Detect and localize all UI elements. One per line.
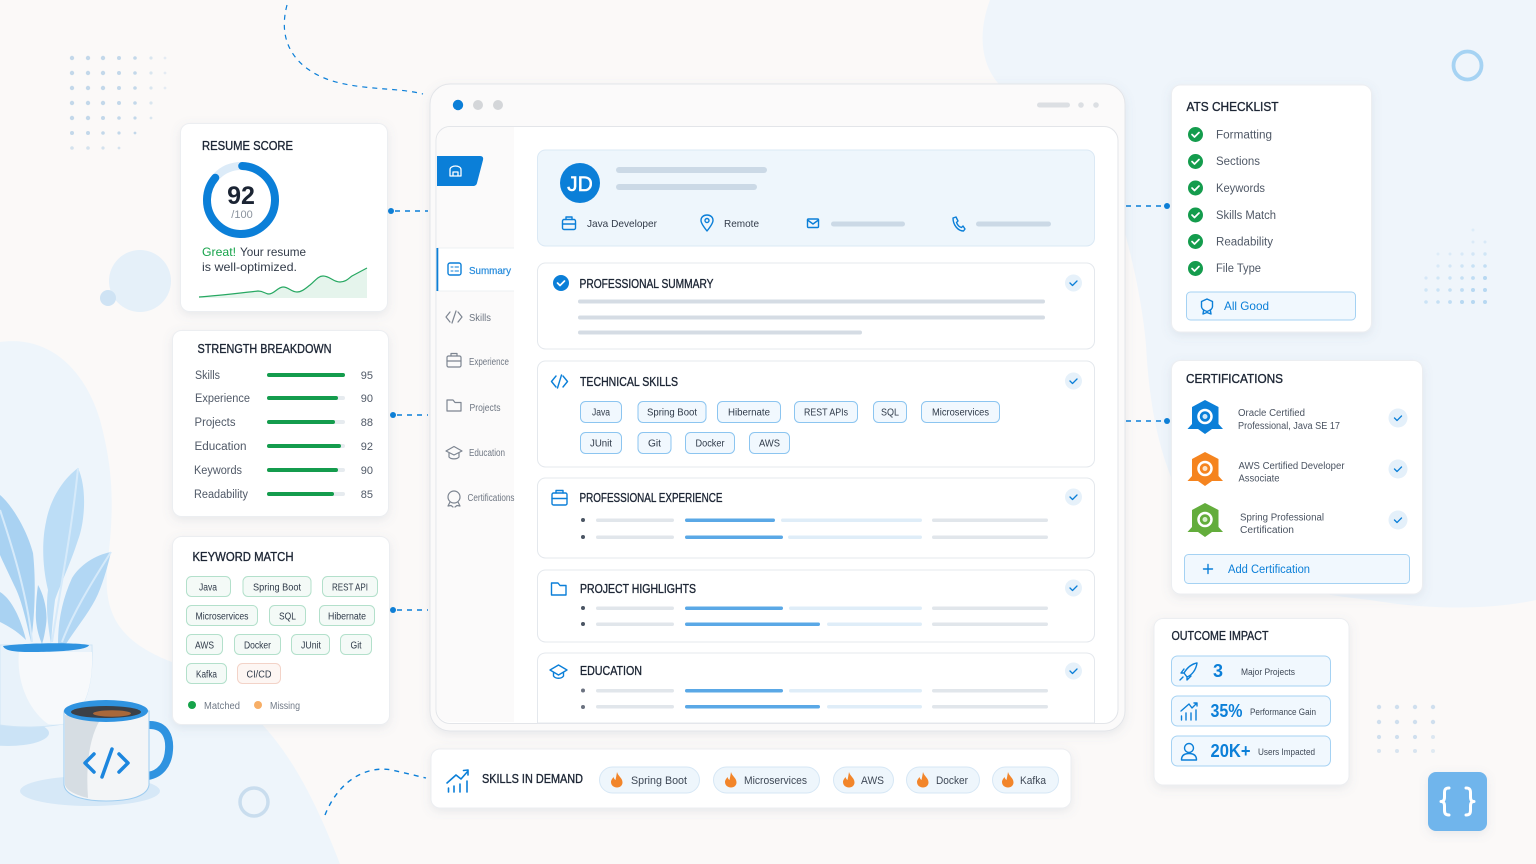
score message [202, 245, 306, 274]
background blob: top right [983, 0, 1536, 608]
demand chips [600, 767, 1058, 793]
panel: ATS checklist [1172, 85, 1372, 332]
heading: certifications: CERTIFICATIONS [1186, 372, 1283, 386]
skill chips: Hibernate [728, 408, 770, 418]
status check [1065, 580, 1082, 596]
icon: code [552, 375, 568, 388]
decorative ring: top right [1454, 52, 1482, 80]
check item: sections [1188, 154, 1260, 169]
metric: major projects: Major Projects [1241, 667, 1295, 677]
heading: strength breakdown: STRENGTH BREAKDOWN [198, 342, 332, 356]
check item: skills match [1188, 208, 1276, 222]
demand chips: AWS [861, 775, 884, 787]
connector: strength breakdown [390, 412, 428, 418]
section: technical skills: TECHNICAL SKILLS [580, 375, 678, 389]
panel: outcome impact [1154, 618, 1349, 785]
nav: summary active [436, 248, 514, 291]
contact row: Java Developer [587, 218, 657, 230]
section: project highlights [538, 570, 1094, 642]
plant pot [0, 645, 92, 727]
metric: performance gain [1172, 696, 1330, 726]
check item: sections: Sections [1216, 156, 1260, 168]
section: professional experience: PROFESSIONAL EXPERIENCE [580, 491, 722, 505]
dashed curve: top [284, 5, 423, 94]
cert: aws: AWS Certified Developer [1238, 461, 1345, 472]
nav: certifications [448, 491, 514, 507]
panel: keyword match [172, 536, 390, 724]
row: skills: Skills [195, 370, 220, 382]
button: add certification [1184, 554, 1410, 584]
keyword chips: CI/CD [246, 670, 272, 680]
status check [1065, 662, 1082, 680]
demand chips: Spring Boot [631, 775, 687, 787]
avatar: JD [567, 173, 593, 196]
icon: folder [552, 583, 566, 595]
illustration: potted plant [0, 468, 111, 746]
demand chips: Kafka [1020, 775, 1047, 787]
illustration: coffee mug [20, 700, 169, 806]
window controls [453, 100, 1099, 110]
keyword chips: JUnit [301, 640, 321, 652]
plant leaves [0, 468, 111, 644]
row: experience [195, 393, 373, 405]
nav: skills: Skills [469, 313, 491, 324]
panel: skills in demand [431, 749, 1071, 808]
text placeholders [578, 300, 1045, 334]
decorative dot grid: top left [70, 56, 166, 150]
decorative ring: bottom [240, 788, 268, 816]
skill chips: Microservices [932, 408, 989, 418]
avatar [560, 163, 600, 203]
check item: readability: Readability [1216, 236, 1273, 248]
row: keywords [194, 465, 373, 477]
nav: experience: Experience [469, 357, 509, 368]
legend [188, 701, 300, 712]
connector: certifications [1126, 418, 1170, 424]
skill chips: Git [648, 438, 661, 450]
keyword chips [186, 576, 378, 684]
cert: oracle: Oracle Certified [1238, 408, 1305, 419]
score message: Your resume [240, 245, 306, 259]
cert: spring: Certification [1240, 525, 1294, 536]
cert: aws: Associate [1238, 474, 1280, 484]
demand chips: Microservices [744, 775, 807, 787]
skill chips: AWS [759, 438, 780, 450]
legend: Missing [270, 701, 300, 712]
sidebar [436, 127, 514, 722]
nav: summary active: Summary [469, 265, 512, 277]
score message: is well-optimized. [202, 260, 297, 274]
icon: graduation cap [550, 665, 567, 678]
panel: resume score [180, 124, 388, 312]
check item: readability [1188, 234, 1273, 249]
row: education: 92 [361, 441, 373, 453]
row: projects [194, 417, 373, 429]
keyword chips: Java [199, 582, 217, 594]
skill chips: SQL [881, 408, 899, 418]
row: skills [195, 370, 373, 382]
section: technical skills [538, 361, 1094, 467]
panel: strength breakdown [172, 330, 388, 516]
row: skills: 95 [361, 370, 373, 382]
button: all good: All Good [1224, 299, 1269, 313]
connector: ATS checklist [1126, 203, 1170, 209]
window content area [436, 126, 1118, 724]
legend: Matched [204, 701, 240, 712]
contact row [562, 215, 1051, 231]
check item: keywords [1188, 180, 1265, 196]
decorative dot grid: bottom right [1377, 705, 1435, 753]
nav: certifications: Certifications [468, 493, 514, 504]
nav: projects [447, 400, 500, 414]
cert: oracle [1188, 400, 1408, 434]
score message: Great! [202, 245, 236, 259]
cert: oracle: Professional, Java SE 17 [1238, 421, 1340, 432]
icon: briefcase [552, 490, 567, 505]
sidebar home tab [437, 156, 483, 186]
score ring: /100 [231, 209, 253, 221]
heading: skills in demand: SKILLS IN DEMAND [482, 772, 583, 786]
status check [1065, 488, 1082, 506]
keyword chips: REST API [332, 582, 368, 594]
keyword chips: Spring Boot [253, 582, 301, 594]
button: add certification: Add Certification [1228, 564, 1310, 576]
demand chips: Docker [936, 775, 968, 787]
experience lines [581, 518, 1048, 539]
heading: ATS checklist: ATS CHECKLIST [1186, 100, 1279, 114]
section: education [538, 653, 1094, 723]
section: professional experience [538, 478, 1094, 558]
status check [1065, 372, 1082, 390]
skill chips: Docker [696, 438, 725, 450]
keyword chips: SQL [279, 612, 296, 622]
row: readability [194, 489, 373, 501]
cert: aws [1188, 452, 1408, 486]
nav: skills [446, 311, 491, 324]
metric: major projects: 3 [1213, 661, 1223, 681]
nav: education [446, 446, 505, 459]
button: all good [1186, 292, 1356, 320]
decorative circles: left [100, 250, 171, 312]
project lines [581, 606, 1048, 626]
metric: users impacted: Users Impacted [1258, 747, 1315, 757]
education lines [581, 688, 1048, 709]
score ring: 92 [227, 182, 255, 210]
check item: formatting: Formatting [1216, 130, 1272, 142]
skill chips: Spring Boot [647, 408, 697, 418]
nav: projects: Projects [470, 403, 500, 414]
check item: formatting [1188, 127, 1272, 142]
row: experience: 90 [361, 393, 373, 405]
decorative dot grid: right [1424, 228, 1487, 304]
heading: resume score: RESUME SCORE [202, 139, 293, 153]
cert: spring [1188, 503, 1408, 537]
connector: resume score [388, 208, 428, 214]
metric: performance gain: Performance Gain [1250, 707, 1316, 717]
icon: trending chart [447, 770, 468, 792]
dashed curve: bottom [325, 769, 426, 815]
section: professional summary [538, 263, 1094, 349]
skill chips: REST APIs [804, 408, 848, 418]
plant shadow [0, 720, 49, 746]
row: readability: Readability [194, 489, 248, 501]
background blob: left [0, 341, 340, 864]
skill chips: Java [592, 408, 610, 418]
row: education [194, 441, 373, 453]
panel: certifications [1172, 360, 1422, 594]
cert: spring: Spring Professional [1240, 512, 1324, 524]
section: education: EDUCATION [580, 664, 642, 678]
row: keywords: 90 [361, 465, 373, 477]
row: projects: Projects [194, 417, 236, 429]
heading: keyword match: KEYWORD MATCH [192, 550, 294, 564]
nav: education: Education [469, 448, 505, 459]
keyword chips: Hibernate [328, 612, 366, 622]
skill chips [580, 402, 1000, 454]
keyword chips: AWS [195, 640, 214, 652]
profile header card [538, 150, 1094, 246]
keyword chips: Microservices [196, 612, 248, 622]
check item: skills match: Skills Match [1216, 210, 1276, 222]
section: project highlights: PROJECT HIGHLIGHTS [580, 582, 696, 596]
check item: keywords: Keywords [1216, 183, 1265, 195]
section: professional summary: PROFESSIONAL SUMMARY [580, 277, 714, 291]
name placeholder bars [616, 167, 767, 190]
row: readability: 85 [361, 489, 373, 501]
sparkline [199, 268, 367, 298]
metric: users impacted [1172, 736, 1330, 766]
main window [430, 84, 1125, 731]
score ring [206, 165, 276, 235]
icon: curly braces tile [1428, 772, 1487, 831]
row: education: Education [194, 441, 246, 453]
status check [1065, 274, 1082, 292]
keyword chips: Docker [244, 640, 272, 652]
check item: file type [1188, 261, 1261, 276]
skill chips: JUnit [590, 438, 612, 450]
check item: file type: File Type [1216, 263, 1261, 275]
nav: experience [447, 354, 509, 368]
icon: check badge [553, 275, 569, 291]
row: experience: Experience [195, 393, 250, 405]
keyword chips: Kafka [196, 670, 217, 680]
metric: users impacted: 20K+ [1210, 741, 1250, 761]
metric: performance gain: 35% [1210, 701, 1242, 721]
heading: outcome impact: OUTCOME IMPACT [1172, 629, 1269, 643]
row: projects: 88 [361, 417, 373, 429]
contact row: Remote [724, 218, 759, 230]
keyword chips: Git [350, 640, 362, 652]
connector: keyword match [390, 607, 428, 613]
row: keywords: Keywords [194, 465, 242, 477]
metric: major projects [1172, 656, 1330, 686]
